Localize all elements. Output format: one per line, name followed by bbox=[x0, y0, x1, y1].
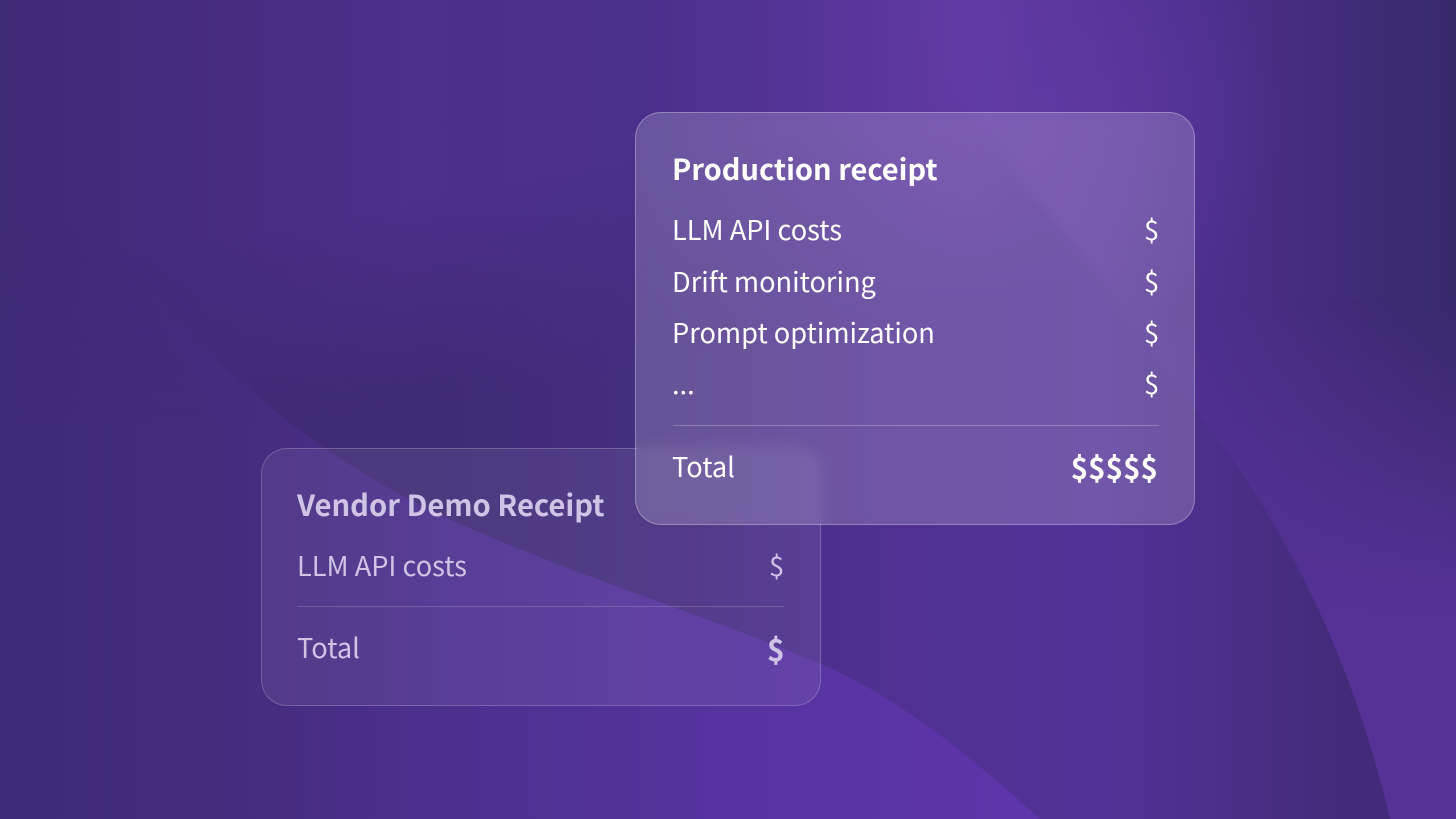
total amount: $ bbox=[767, 626, 785, 670]
amount: drift monitoring: $ bbox=[1144, 260, 1159, 300]
line item: LLM API costs: LLM API costs bbox=[297, 544, 467, 584]
amount: prompt optimization: $ bbox=[1144, 311, 1159, 351]
divider bbox=[673, 425, 1159, 426]
amount: ellipsis: $ bbox=[1144, 362, 1159, 402]
total label: Total bbox=[672, 445, 735, 485]
line item: ellipsis: ... bbox=[672, 362, 695, 402]
total amount: $$$$$ bbox=[1071, 445, 1158, 488]
total label: Total bbox=[297, 626, 360, 666]
panel: vendor demo receipt bbox=[261, 448, 821, 706]
panel: production receipt bbox=[635, 112, 1195, 525]
line item: LLM API costs: LLM API costs bbox=[672, 208, 842, 248]
heading: production receipt: Production receipt bbox=[672, 147, 938, 189]
heading: vendor demo receipt: Vendor Demo Receipt bbox=[297, 483, 605, 525]
divider bbox=[297, 606, 784, 607]
amount: LLM API costs: $ bbox=[769, 544, 784, 584]
amount: LLM API costs: $ bbox=[1144, 208, 1159, 248]
line item: drift monitoring: Drift monitoring bbox=[672, 260, 876, 300]
line item: prompt optimization: Prompt optimization bbox=[672, 311, 935, 351]
